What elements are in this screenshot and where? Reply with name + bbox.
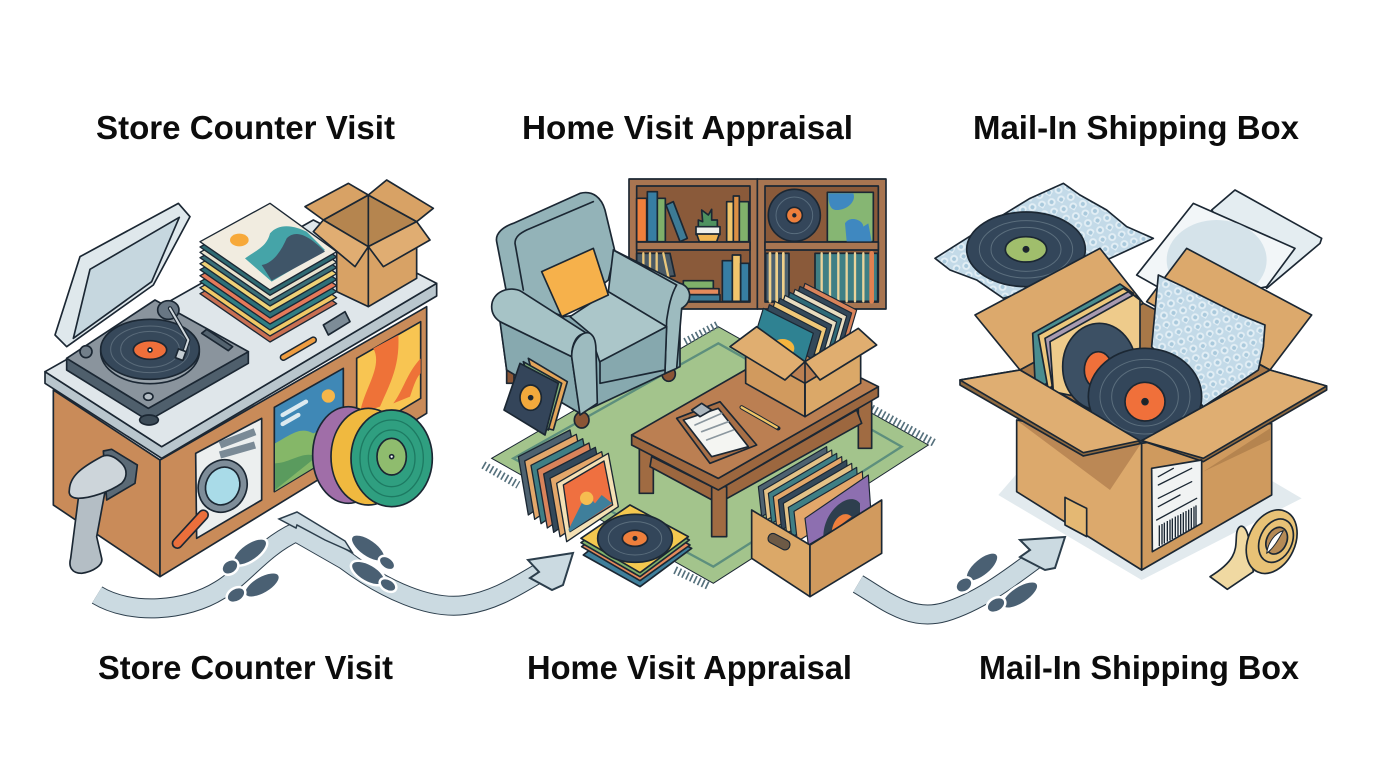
tape roll (1210, 502, 1307, 589)
box body (1017, 420, 1272, 570)
poster: abstract waves (357, 322, 421, 437)
bubble wrap in box (1152, 275, 1265, 407)
clear plastic sleeves (1137, 190, 1322, 303)
vinyl record on bubble wrap (967, 212, 1085, 287)
icon: footprints on second path (953, 547, 1043, 616)
clipboard with notes (677, 402, 757, 463)
shipping label (1152, 460, 1202, 552)
vinyl record in box (1088, 348, 1202, 445)
back box flaps and interior (975, 248, 1312, 440)
caption: mail-in shipping box: Mail-In Shipping Box (979, 649, 1300, 686)
bubble wrap sheet (935, 183, 1153, 298)
heading: home visit appraisal: Home Visit Appraisal (522, 109, 853, 146)
poster: landscape (274, 368, 343, 492)
scene: home visit (483, 179, 935, 597)
front box flaps (960, 370, 1327, 462)
armchair (492, 193, 690, 428)
small cassette (323, 312, 350, 335)
floor stack of records with sunset art (518, 430, 618, 542)
box ground shadow (998, 470, 1302, 580)
leaning record sleeves (504, 358, 567, 435)
rug (483, 324, 935, 587)
turntable (67, 300, 248, 425)
records inside the box (1033, 284, 1140, 410)
caption: store counter visit: Store Counter Visit (98, 649, 393, 686)
coffee table (632, 343, 878, 537)
counter top (45, 220, 437, 458)
box of records on table (730, 283, 877, 417)
paper under magnifier (196, 418, 262, 538)
scene: store counter (45, 180, 437, 577)
caption: home visit appraisal: Home Visit Appraisal (527, 649, 852, 686)
heading: store counter visit: Store Counter Visit (96, 109, 395, 146)
icon: magnifying glass (177, 452, 256, 543)
arrow: path from home to mail (858, 537, 1065, 615)
cardboard box on counter (305, 180, 433, 307)
scene: mail-in box (935, 183, 1327, 589)
stack of record sleeves (200, 203, 337, 342)
tape on box (1065, 497, 1087, 537)
arrow: path from store to home (97, 512, 573, 608)
turntable lid (55, 203, 190, 347)
pencil on table (742, 407, 778, 428)
bookshelf (629, 179, 886, 309)
crate of records (752, 447, 882, 597)
pencil (283, 340, 313, 357)
icon: barcode scanner (69, 449, 137, 573)
icon: footprints on first path (219, 529, 399, 606)
vinyl on sleeves (581, 505, 692, 587)
record stack: colourful discs (313, 407, 432, 507)
heading: mail-in shipping box: Mail-In Shipping Box (973, 109, 1300, 146)
counter body (53, 307, 427, 577)
